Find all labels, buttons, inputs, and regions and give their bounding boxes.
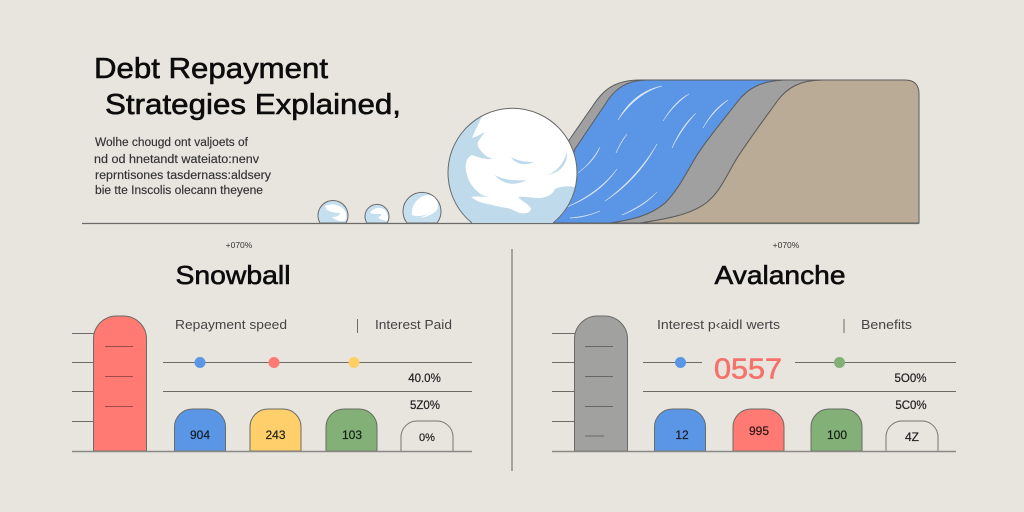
intro text block: bie tte Inscolis olecann theyene xyxy=(95,185,263,197)
avalanche baseline xyxy=(552,450,956,452)
percent values xyxy=(895,373,927,412)
bar: green 100: 100 xyxy=(827,428,847,442)
rear grey slope xyxy=(565,80,670,170)
percent values: 40.0% xyxy=(408,373,441,385)
illustration: mountain slope xyxy=(552,80,919,223)
title: Debt Repayment xyxy=(94,53,328,85)
bar: empty 0% xyxy=(401,421,453,451)
bar: yellow 243 xyxy=(250,409,301,451)
intro text block: nd od hnetandt wateiato:nenv xyxy=(94,154,259,166)
timeline dots xyxy=(194,357,360,368)
axis lines xyxy=(552,319,956,422)
heading: Avalanche: Avalanche xyxy=(714,260,846,290)
bar: empty 4Z: 4Z xyxy=(905,430,919,444)
tall red gauge xyxy=(94,316,146,451)
intro text block: Wolhe chougd ont valjoets of xyxy=(95,137,249,149)
percent values: 5O0% xyxy=(895,373,926,385)
axis lines xyxy=(72,319,472,422)
heading: Snowball: Snowball xyxy=(176,260,290,290)
red figure 0557: 0557 xyxy=(714,354,782,386)
flow streaks xyxy=(567,86,728,218)
intro text block xyxy=(94,137,271,197)
snowball percent tag: +070% xyxy=(226,240,253,250)
labels: repayment speed and interest paid xyxy=(175,317,452,332)
bar: empty 4Z xyxy=(886,421,938,451)
bar: green 103 xyxy=(326,409,377,451)
labels: repayment speed and interest paid: Interest Paid xyxy=(375,317,452,332)
ground line xyxy=(82,222,919,224)
icon: small snowball 3 xyxy=(403,192,441,223)
blue avalanche flow xyxy=(552,80,783,223)
labels: interest paid and benefits: Interest p‹aidl werts xyxy=(657,317,781,332)
labels: interest paid and benefits xyxy=(657,317,913,332)
bar: blue 904 xyxy=(174,409,226,451)
tall grey gauge xyxy=(574,316,628,451)
percent values: 5C0% xyxy=(895,400,927,412)
central divider xyxy=(511,249,513,471)
bar: blue 904: 904 xyxy=(190,428,210,442)
icon: small snowball 1 xyxy=(318,201,348,223)
bar: red 995: 995 xyxy=(749,424,769,438)
avalanche percent tag: +070% xyxy=(773,240,800,250)
bar: green 100 xyxy=(811,409,862,451)
timeline dots xyxy=(675,357,845,368)
bar: blue 12 xyxy=(654,409,706,451)
intro text block: reprntisones tasdernass:aldsery xyxy=(95,170,271,182)
percent values xyxy=(408,373,441,412)
title: Strategies Explained, xyxy=(105,89,401,121)
snowball baseline xyxy=(72,450,472,452)
panel: Avalanche xyxy=(552,240,956,452)
tan hillside xyxy=(640,80,919,223)
title xyxy=(94,53,401,121)
bar: empty 0%: 0% xyxy=(419,432,435,444)
bar: red 995 xyxy=(733,409,784,451)
front grey slope xyxy=(610,80,822,223)
panel: Snowball xyxy=(72,240,472,452)
bar: yellow 243: 243 xyxy=(265,428,286,442)
bar: blue 12: 12 xyxy=(675,428,689,442)
labels: repayment speed and interest paid: Repayment speed xyxy=(175,317,287,332)
bar: green 103: 103 xyxy=(342,428,362,442)
percent values: 5Z0% xyxy=(410,400,440,412)
labels: interest paid and benefits: Benefits xyxy=(861,317,913,332)
icon: small snowball 2 xyxy=(365,204,389,223)
icon: large snowball xyxy=(448,108,577,223)
